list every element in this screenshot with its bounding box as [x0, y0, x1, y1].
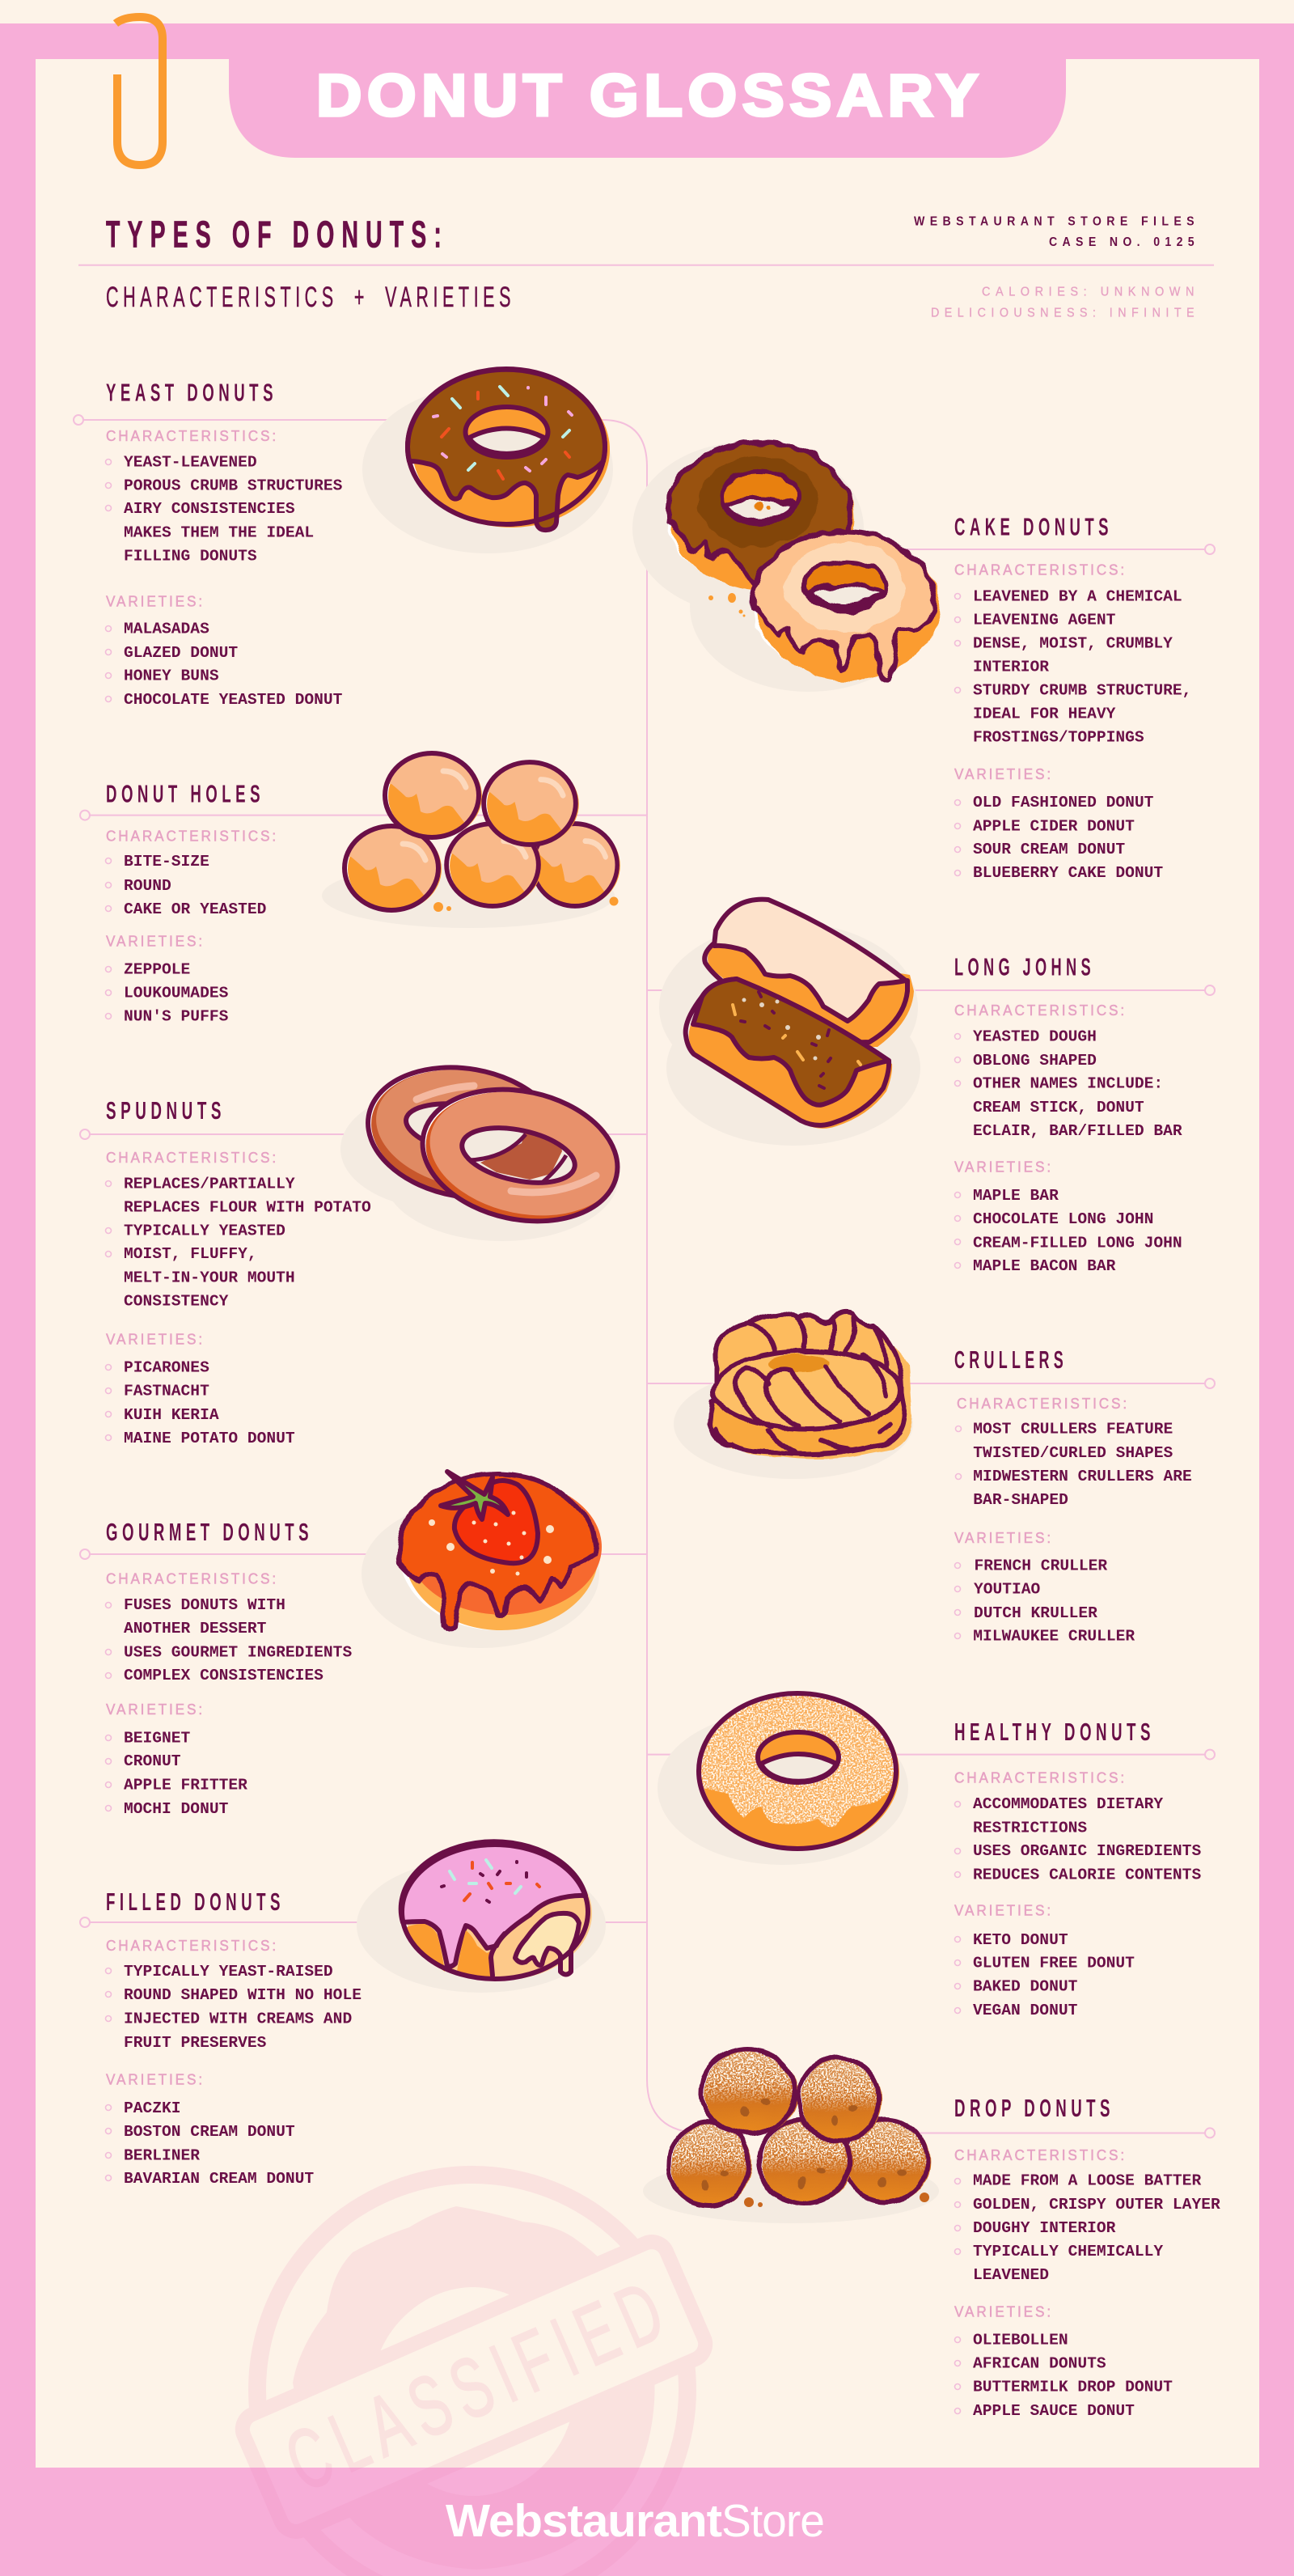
illustration: gourmet strawberry donut: [362, 1472, 602, 1648]
illustration: cake donuts: [632, 442, 940, 692]
characteristics list: REPLACES/PARTIALLY: [124, 1175, 295, 1193]
characteristics list: ANOTHER DESSERT: [124, 1620, 267, 1638]
characteristics list: [954, 1795, 1201, 1883]
varieties list: [954, 794, 1163, 882]
characteristics list: ROUND: [124, 877, 171, 895]
varieties list: APPLE SAUCE DONUT: [973, 2402, 1135, 2420]
characteristics list: MELT-IN-YOUR MOUTH: [124, 1269, 295, 1287]
characteristics list: CAKE OR YEASTED: [124, 900, 266, 918]
varieties list: GLAZED DONUT: [124, 644, 238, 662]
heading: CAKE DONUTS: [954, 513, 1113, 540]
characteristics list: YEASTED DOUGH: [973, 1027, 1097, 1045]
characteristics list: CONSISTENCY: [124, 1293, 229, 1311]
characteristics label: CHARACTERISTICS:: [954, 1770, 1127, 1786]
subheading: CHARACTERISTICS + VARIETIES: [106, 282, 515, 313]
characteristics list: MADE FROM A LOOSE BATTER: [973, 2172, 1201, 2190]
characteristics list: MOIST, FLUFFY,: [124, 1245, 257, 1263]
characteristics label: CHARACTERISTICS:: [106, 1150, 278, 1166]
varieties list: MOCHI DONUT: [124, 1800, 229, 1818]
case file text: WEBSTAURANT STORE FILES: [914, 214, 1199, 228]
classified stamp: [235, 2166, 713, 2468]
characteristics label: CHARACTERISTICS:: [954, 2147, 1127, 2163]
characteristics list: BITE-SIZE: [124, 853, 209, 871]
panel: gourmet donuts: [105, 1519, 352, 1818]
varieties list: ZEPPOLE: [124, 960, 190, 978]
panel: spudnuts: [105, 1097, 371, 1447]
characteristics list: TYPICALLY CHEMICALLY: [973, 2243, 1163, 2260]
characteristics list: TYPICALLY YEASTED: [124, 1222, 285, 1239]
panel: cake donuts: [954, 513, 1191, 882]
heading: LONG JOHNS: [954, 954, 1095, 981]
varieties list: BLUEBERRY CAKE DONUT: [973, 864, 1163, 882]
characteristics label: CHARACTERISTICS:: [106, 828, 278, 844]
characteristics label: CHARACTERISTICS:: [954, 561, 1127, 578]
varieties list: [954, 1187, 1182, 1275]
varieties list: [954, 1931, 1135, 2019]
characteristics list: MAKES THEM THE IDEAL: [124, 523, 314, 541]
varieties list: APPLE FRITTER: [124, 1777, 247, 1794]
varieties label: VARIETIES:: [954, 766, 1053, 782]
varieties label: VARIETIES:: [954, 1159, 1053, 1175]
panel: healthy donuts: [954, 1718, 1201, 2019]
varieties list: LOUKOUMADES: [124, 984, 229, 1002]
varieties list: HONEY BUNS: [124, 667, 219, 685]
varieties list: OLD FASHIONED DONUT: [973, 794, 1154, 811]
illustration: filled donut: [357, 1841, 606, 1993]
icon: paperclip: [116, 17, 163, 165]
varieties list: SOUR CREAM DONUT: [973, 841, 1125, 858]
varieties list: NUN'S PUFFS: [124, 1008, 229, 1026]
characteristics list: USES ORGANIC INGREDIENTS: [973, 1842, 1201, 1860]
panel: donut holes: [105, 781, 278, 1026]
case file text: [914, 214, 1199, 320]
heading: YEAST DONUTS: [106, 379, 277, 407]
characteristics list: [105, 1963, 362, 2052]
heading: CRULLERS: [954, 1346, 1068, 1374]
varieties list: MAPLE BAR: [973, 1187, 1059, 1205]
varieties list: CHOCOLATE LONG JOHN: [973, 1210, 1153, 1228]
varieties list: BUTTERMILK DROP DONUT: [973, 2379, 1173, 2396]
heading: SPUDNUTS: [106, 1097, 226, 1125]
characteristics list: STURDY CRUMB STRUCTURE,: [973, 681, 1191, 699]
characteristics list: [954, 588, 1191, 747]
characteristics list: REDUCES CALORIE CONTENTS: [973, 1866, 1201, 1883]
characteristics label: CHARACTERISTICS:: [106, 428, 278, 444]
varieties label: VARIETIES:: [954, 1903, 1053, 1919]
illustration: donut holes: [322, 747, 620, 928]
panel: yeast donuts: [105, 379, 343, 709]
characteristics list: INJECTED WITH CREAMS AND: [124, 2010, 352, 2028]
varieties label: VARIETIES:: [954, 1530, 1053, 1546]
illustration: long johns: [659, 900, 920, 1146]
varieties list: [105, 1359, 295, 1447]
varieties label: VARIETIES:: [106, 593, 205, 609]
illustration: drop donuts: [643, 2049, 939, 2223]
characteristics list: LEAVENED: [973, 2266, 1049, 2284]
varieties list: CREAM-FILLED LONG JOHN: [973, 1234, 1182, 1252]
varieties list: APPLE CIDER DONUT: [973, 817, 1135, 835]
panel: drop donuts: [954, 2095, 1220, 2420]
illustration: spudnuts: [340, 1065, 620, 1241]
characteristics list: [954, 1027, 1182, 1140]
heading: HEALTHY DONUTS: [954, 1718, 1155, 1746]
characteristics list: COMPLEX CONSISTENCIES: [124, 1667, 324, 1684]
characteristics list: ROUND SHAPED WITH NO HOLE: [124, 1986, 362, 2004]
varieties list: DUTCH KRULLER: [974, 1604, 1097, 1622]
characteristics label: CHARACTERISTICS:: [106, 1938, 278, 1954]
characteristics list: ECLAIR, BAR/FILLED BAR: [973, 1122, 1182, 1140]
varieties list: YOUTIAO: [974, 1581, 1041, 1599]
varieties list: MAINE POTATO DONUT: [124, 1430, 295, 1447]
characteristics label: CHARACTERISTICS:: [954, 1002, 1127, 1019]
characteristics list: OTHER NAMES INCLUDE:: [973, 1074, 1163, 1092]
characteristics list: GOLDEN, CRISPY OUTER LAYER: [973, 2196, 1220, 2214]
heading: types of donuts: TYPES OF DONUTS:: [106, 214, 449, 256]
varieties list: MAPLE BACON BAR: [973, 1257, 1116, 1275]
characteristics list: MIDWESTERN CRULLERS ARE: [973, 1468, 1192, 1485]
characteristics list: BAR-SHAPED: [973, 1491, 1068, 1509]
characteristics list: [105, 1175, 371, 1311]
varieties list: FRENCH CRULLER: [974, 1557, 1107, 1574]
varieties list: [105, 2099, 314, 2188]
varieties label: VARIETIES:: [106, 1701, 205, 1718]
footer logo: Webstaurant: [446, 2495, 722, 2547]
characteristics list: TWISTED/CURLED SHAPES: [973, 1444, 1173, 1462]
varieties list: BERLINER: [124, 2147, 200, 2165]
varieties list: PACZKI: [124, 2099, 181, 2117]
varieties list: OLIEBOLLEN: [973, 2332, 1068, 2349]
varieties list: [105, 960, 229, 1026]
characteristics list: FRUIT PRESERVES: [124, 2034, 267, 2052]
varieties list: BAVARIAN CREAM DONUT: [124, 2170, 314, 2188]
varieties label: VARIETIES:: [954, 2304, 1053, 2320]
varieties list: CRONUT: [124, 1752, 181, 1770]
varieties label: VARIETIES:: [106, 2071, 205, 2087]
case file text: CASE NO. 0125: [1049, 235, 1199, 249]
header block: [78, 214, 1214, 320]
varieties list: KETO DONUT: [973, 1931, 1068, 1949]
characteristics list: POROUS CRUMB STRUCTURES: [124, 477, 343, 495]
title: DONUT GLOSSARY: [316, 63, 983, 129]
characteristics list: IDEAL FOR HEAVY: [973, 705, 1116, 722]
characteristics list: DOUGHY INTERIOR: [973, 2219, 1116, 2237]
varieties list: KUIH KERIA: [124, 1406, 219, 1424]
case file text: CALORIES: UNKNOWN: [982, 286, 1199, 299]
title tab: [229, 59, 1066, 158]
case file text: DELICIOUSNESS: INFINITE: [931, 307, 1199, 320]
heading: FILLED DONUTS: [106, 1888, 285, 1916]
varieties label: VARIETIES:: [106, 1332, 205, 1348]
characteristics label: CHARACTERISTICS:: [106, 1571, 278, 1587]
characteristics list: OBLONG SHAPED: [973, 1052, 1097, 1070]
varieties list: MILWAUKEE CRULLER: [973, 1628, 1135, 1646]
characteristics list: YEAST-LEAVENED: [124, 454, 257, 472]
characteristics list: [954, 2172, 1220, 2284]
classified stamp: CLASSIFIED: [273, 2260, 685, 2510]
varieties list: BAKED DONUT: [973, 1978, 1078, 1996]
varieties list: [105, 621, 343, 709]
characteristics list: [105, 1596, 352, 1684]
characteristics list: FUSES DONUTS WITH: [124, 1596, 285, 1614]
varieties list: AFRICAN DONUTS: [973, 2354, 1106, 2372]
characteristics list: AIRY CONSISTENCIES: [124, 500, 295, 518]
characteristics label: CHARACTERISTICS:: [957, 1396, 1129, 1412]
characteristics list: CREAM STICK, DONUT: [973, 1099, 1144, 1116]
characteristics list: [105, 853, 266, 918]
characteristics list: FROSTINGS/TOPPINGS: [973, 729, 1144, 747]
connector lines: [74, 415, 1215, 2137]
characteristics list: FILLING DONUTS: [124, 548, 257, 566]
characteristics list: [105, 454, 343, 566]
panel: crullers: [954, 1346, 1192, 1646]
characteristics list: RESTRICTIONS: [973, 1819, 1087, 1837]
characteristics list: DENSE, MOIST, CRUMBLY: [973, 634, 1173, 652]
varieties list: [954, 2332, 1173, 2420]
characteristics list: ACCOMMODATES DIETARY: [973, 1795, 1163, 1813]
varieties list: FASTNACHT: [124, 1382, 209, 1400]
illustration: healthy powdered donut: [658, 1693, 908, 1865]
illustration: yeast donut: [362, 369, 613, 553]
characteristics list: TYPICALLY YEAST-RAISED: [124, 1963, 333, 1981]
varieties list: GLUTEN FREE DONUT: [973, 1955, 1135, 1972]
varieties list: MALASADAS: [124, 621, 209, 638]
characteristics list: USES GOURMET INGREDIENTS: [124, 1644, 352, 1662]
footer logo: Store: [721, 2495, 824, 2547]
heading: DONUT HOLES: [106, 781, 264, 808]
heading: DROP DONUTS: [954, 2095, 1114, 2122]
varieties list: [954, 1557, 1135, 1646]
characteristics list: REPLACES FLOUR WITH POTATO: [124, 1198, 371, 1216]
varieties list: VEGAN DONUT: [973, 2002, 1078, 2019]
panel: long johns: [954, 954, 1182, 1275]
varieties list: BEIGNET: [124, 1730, 191, 1748]
varieties list: CHOCOLATE YEASTED DONUT: [124, 691, 343, 709]
characteristics list: LEAVENED BY A CHEMICAL: [973, 588, 1182, 606]
heading: GOURMET DONUTS: [106, 1519, 313, 1546]
characteristics list: MOST CRULLERS FEATURE: [973, 1421, 1173, 1438]
illustration: crullers: [674, 1312, 913, 1479]
characteristics list: LEAVENING AGENT: [973, 612, 1116, 629]
characteristics list: INTERIOR: [973, 659, 1049, 676]
panel: filled donuts: [105, 1888, 362, 2188]
varieties list: PICARONES: [124, 1359, 209, 1377]
varieties list: BOSTON CREAM DONUT: [124, 2123, 295, 2141]
varieties label: VARIETIES:: [106, 933, 205, 949]
varieties list: [105, 1730, 247, 1818]
characteristics list: [956, 1421, 1192, 1509]
